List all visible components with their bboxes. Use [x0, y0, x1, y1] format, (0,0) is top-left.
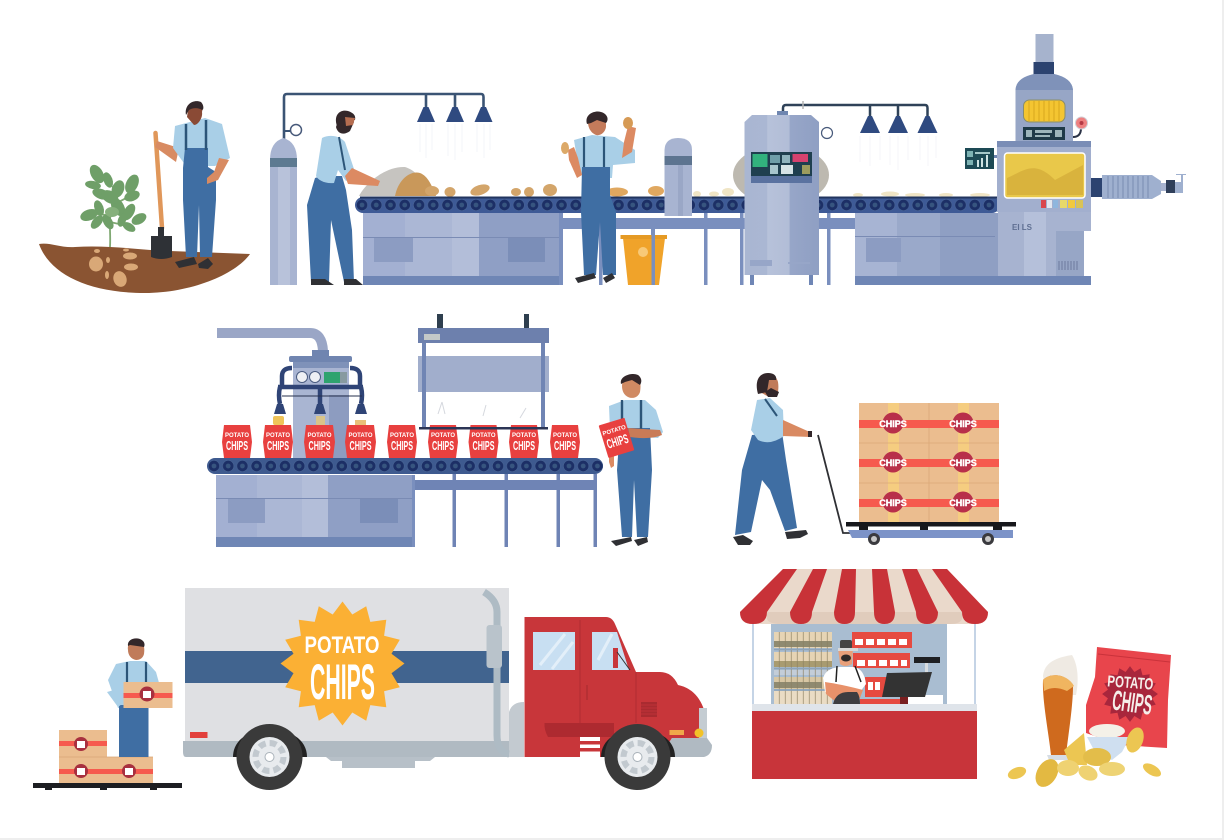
second table — [855, 213, 1091, 285]
product shelves — [774, 632, 832, 704]
truck cab — [524, 617, 712, 757]
table frame — [415, 474, 597, 547]
chip bag: CHIPS — [1110, 684, 1154, 721]
soil mound — [39, 244, 250, 293]
bag 1 — [222, 425, 252, 458]
stage: chips and beer snack — [1006, 647, 1171, 791]
stacked cartons: CHIPS — [949, 458, 977, 468]
bag 5: POTATO — [390, 433, 414, 439]
potato chips pile — [1006, 725, 1163, 791]
stage: washing and sorting line — [270, 34, 1186, 285]
ground cartons on pallet — [33, 730, 182, 790]
bag 8 — [509, 425, 539, 458]
stacked cartons: CHIPS — [879, 419, 907, 429]
stage: loading and delivery — [33, 588, 712, 790]
delivery truck — [183, 588, 712, 790]
sorting worker — [561, 112, 636, 283]
water pipe with spray lamps — [284, 94, 492, 160]
fryer machine — [997, 34, 1091, 276]
starburst logo: POTATO — [304, 632, 380, 659]
bag 2: CHIPS — [267, 438, 289, 453]
stacked cartons: CHIPS — [949, 498, 977, 508]
potatoes on belt — [359, 167, 990, 198]
small tank — [664, 138, 692, 216]
bag 1: CHIPS — [226, 438, 248, 453]
striped awning — [740, 569, 988, 624]
bag 4: CHIPS — [350, 438, 372, 453]
packaging conveyor belt — [207, 458, 603, 474]
worker loading potatoes — [307, 111, 380, 285]
starburst logo: CHIPS — [310, 654, 375, 710]
truck cargo box — [185, 588, 509, 741]
bag 5 — [387, 425, 417, 458]
stacked cartons: CHIPS — [949, 419, 977, 429]
bag 9 — [550, 425, 580, 458]
bag 9: CHIPS — [554, 438, 576, 453]
sealing press — [418, 314, 549, 428]
farmer — [155, 101, 230, 269]
yellow waste bin — [620, 235, 667, 285]
counter — [752, 704, 977, 779]
bag 4 — [345, 425, 376, 458]
bag in hands — [599, 418, 634, 458]
starburst logo — [280, 602, 404, 726]
carried box — [124, 682, 172, 708]
beer glass — [1043, 655, 1078, 760]
filling machine — [217, 333, 367, 458]
bag in hands: CHIPS — [605, 431, 630, 452]
bag 5: CHIPS — [391, 438, 413, 453]
chip bag — [1086, 647, 1171, 748]
exhaust pipe — [484, 592, 509, 754]
bag 7: CHIPS — [472, 438, 495, 453]
conveyor belt — [355, 196, 1000, 213]
gas cylinder — [270, 138, 297, 285]
cashier — [823, 640, 866, 704]
stacked cartons: CHIPS — [879, 498, 907, 508]
stage: retail kiosk — [740, 569, 988, 779]
bag in hands: POTATO — [602, 425, 627, 438]
chassis rail — [183, 741, 509, 757]
bag 7: POTATO — [472, 433, 496, 439]
machine marking: EI LS — [1012, 223, 1033, 232]
worker pushing pallet truck — [733, 373, 812, 545]
rear wheel — [233, 724, 307, 790]
pallet truck — [818, 435, 1016, 545]
conveyor legs and beam — [563, 213, 855, 285]
washing table — [363, 213, 563, 285]
kiosk posts — [753, 624, 975, 705]
press lower bar — [419, 427, 548, 430]
bag 6: POTATO — [431, 433, 455, 439]
cash register — [882, 657, 943, 704]
bag 8: POTATO — [512, 433, 536, 439]
stage: pallet transport — [733, 373, 1016, 545]
bag 9: POTATO — [553, 433, 577, 439]
bag 3: POTATO — [308, 433, 332, 439]
bag 6: CHIPS — [432, 438, 454, 453]
chip bag: POTATO — [1107, 673, 1154, 694]
potato plant — [79, 162, 148, 247]
output tube — [1091, 174, 1186, 199]
front leg over bin — [652, 229, 655, 285]
bags of chips row — [222, 425, 580, 458]
blue stripe — [185, 651, 509, 683]
bag 8: CHIPS — [513, 438, 535, 453]
rear fender — [509, 702, 524, 757]
back wall — [771, 624, 947, 704]
stacked cartons: CHIPS — [879, 458, 907, 468]
side control screen — [965, 148, 997, 169]
bag 4: POTATO — [348, 433, 373, 439]
bag 1: POTATO — [225, 433, 249, 439]
delivery worker carrying box — [107, 638, 172, 757]
bag 3 — [304, 425, 335, 458]
bag 2: POTATO — [266, 433, 290, 439]
stage: potato farming — [39, 101, 250, 293]
bag 3: CHIPS — [308, 438, 331, 453]
bag 6 — [428, 425, 458, 458]
packer worker — [599, 374, 663, 546]
stage: packaging line — [207, 314, 663, 547]
carton logos — [882, 412, 974, 512]
bag 2 — [263, 425, 293, 458]
peeling tank with control panel — [733, 111, 829, 285]
packaging table — [216, 475, 415, 547]
shovel — [151, 133, 172, 259]
steam pipe with lamps — [783, 101, 938, 170]
stacked cartons — [859, 403, 999, 522]
front wheel — [601, 724, 675, 790]
bag 7 — [468, 425, 498, 458]
potatoes in soil — [89, 248, 138, 289]
red snack displays — [852, 632, 912, 704]
dip bowl — [1087, 724, 1130, 760]
